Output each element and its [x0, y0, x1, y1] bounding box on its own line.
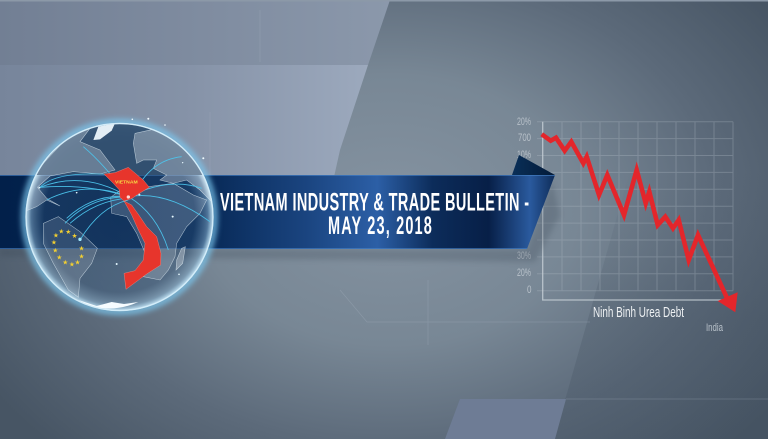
- upper ocean: [36, 124, 202, 175]
- ring of yellow stars: ★: [79, 245, 85, 253]
- title: MAY 23, 2018: [328, 213, 432, 240]
- continents: [20, 128, 220, 297]
- ring of yellow stars: ★: [69, 260, 75, 268]
- bottom polar ice: [78, 300, 138, 309]
- globe glow: [24, 122, 214, 312]
- ribbon banner: [0, 155, 560, 262]
- ring of yellow stars: ★: [58, 228, 64, 236]
- Greenland: [93, 123, 115, 140]
- y-axis labels: 20%: [517, 267, 531, 279]
- ring of yellow stars: ★: [65, 228, 71, 236]
- ribbon fold: [512, 155, 555, 175]
- globe rim: [26, 124, 213, 310]
- globe: [20, 118, 220, 312]
- floating particles: [132, 118, 204, 159]
- ring of yellow stars: ★: [72, 232, 78, 240]
- ring of yellow stars: ★: [53, 232, 59, 240]
- route hub glows: [38, 162, 183, 275]
- y-axis labels: [517, 116, 532, 296]
- title: VIETNAM INDUSTRY & TRADE BULLETIN -: [220, 190, 529, 217]
- y-axis labels: 700: [518, 132, 531, 144]
- ring of yellow stars: ★: [75, 258, 81, 266]
- chart grid: [537, 122, 733, 291]
- line chart: Ninh Binh Urea Debt: [517, 116, 738, 334]
- ring of yellow stars: ★: [51, 239, 57, 247]
- ring of yellow stars: ★: [79, 252, 85, 260]
- ring of yellow stars: [51, 228, 85, 268]
- trade route lines: [40, 147, 210, 250]
- red declining arrow: [542, 134, 738, 312]
- y-axis labels: 30%: [517, 250, 531, 262]
- y-axis labels: 20%: [517, 116, 531, 128]
- Vietnam label: VIETNAM: [115, 180, 138, 185]
- x-axis title: Ninh Binh Urea Debt: [593, 304, 685, 321]
- ribbon shadow: [0, 180, 560, 262]
- ring of yellow stars: ★: [52, 247, 58, 255]
- title: [220, 190, 529, 240]
- y-axis labels: 10%: [517, 149, 531, 161]
- globe sphere: [26, 123, 214, 311]
- India label: India: [706, 322, 724, 334]
- chart axes: [543, 122, 722, 300]
- ring of yellow stars: ★: [62, 258, 68, 266]
- Vietnam map: [104, 167, 161, 289]
- y-axis labels: 0: [527, 284, 532, 296]
- ring of yellow stars: ★: [56, 253, 62, 261]
- ribbon body: [0, 175, 555, 249]
